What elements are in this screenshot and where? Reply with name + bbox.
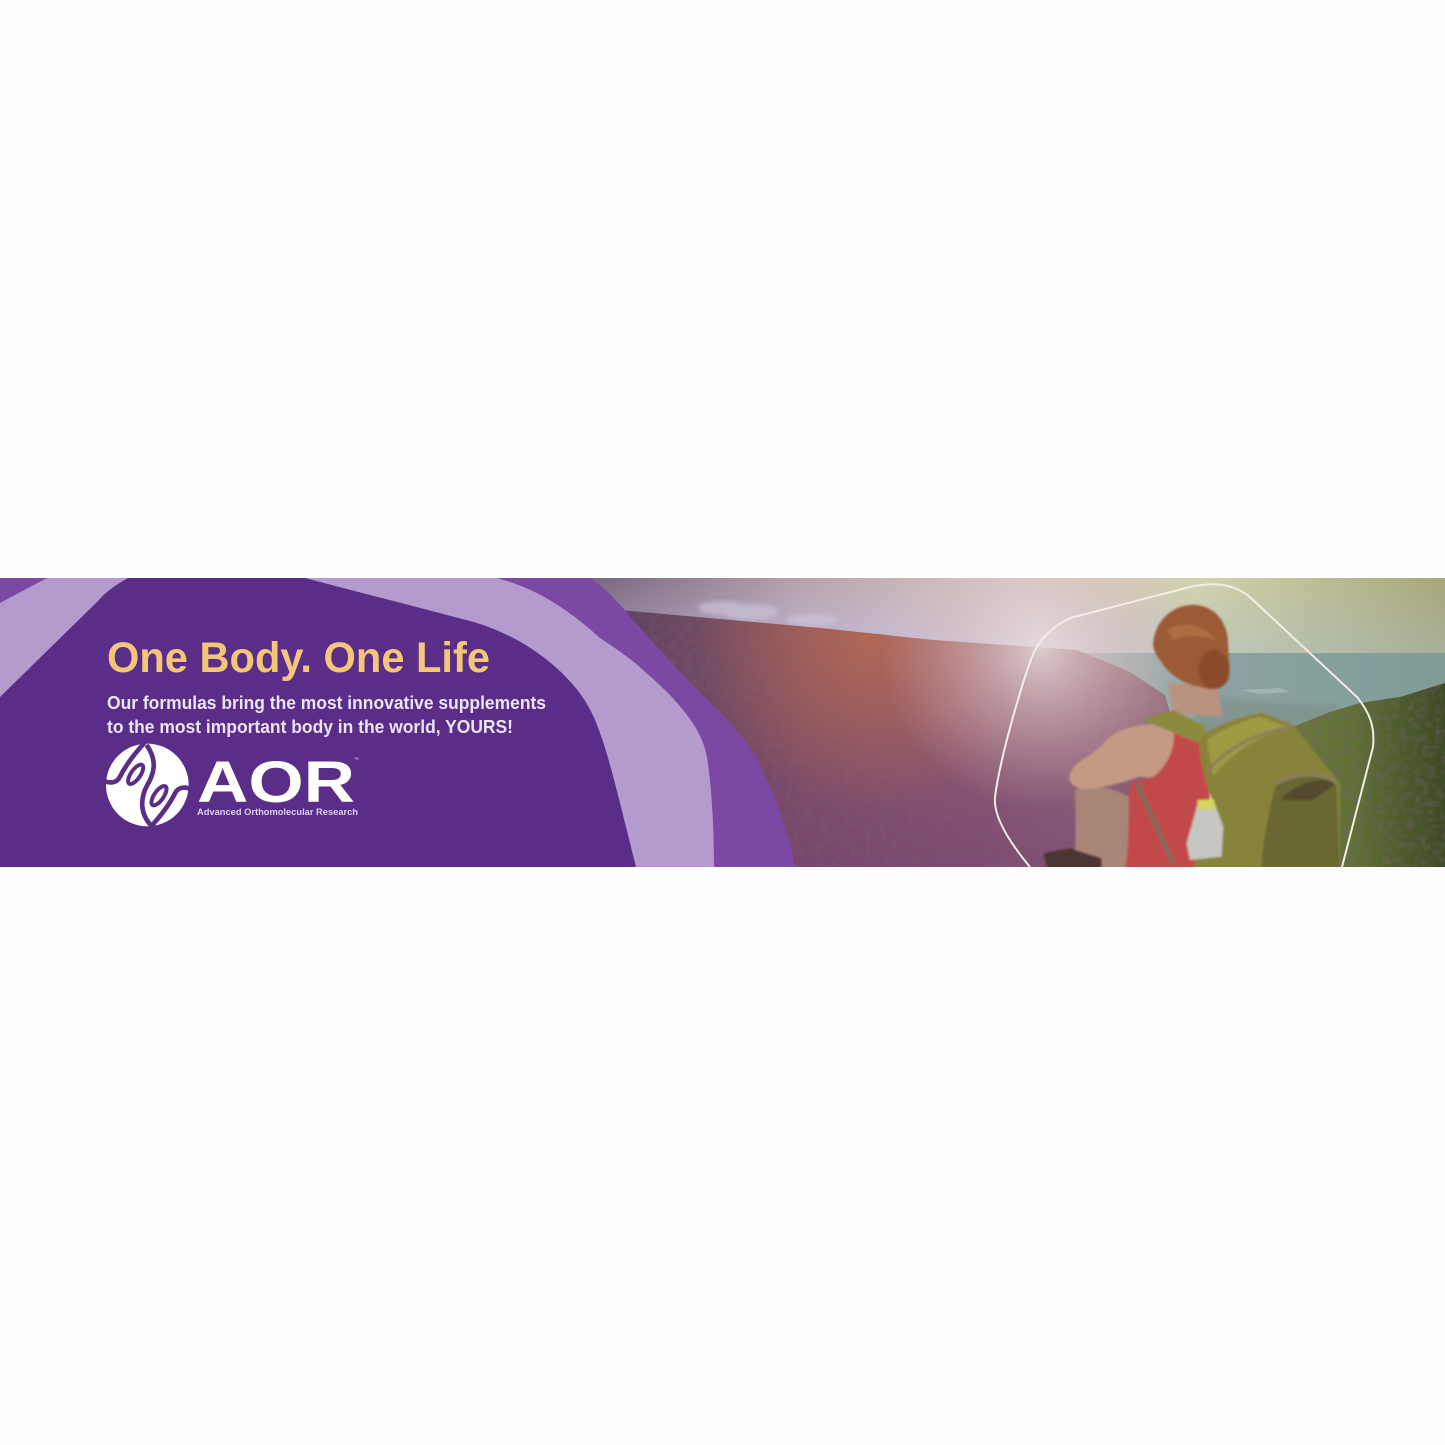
photo: hiker with backpack [1043,605,1340,880]
hexagonal outline [995,584,1373,867]
hair [1153,605,1230,689]
tagline: Advanced Orthomolecular Research [197,807,358,817]
trademark: ™ [354,757,359,763]
wordmark: AOR [197,750,355,815]
subtext: to the most important body in the world, YOURS! [107,717,513,737]
purple corner [0,578,47,603]
hillside [625,610,1170,867]
backpack pocket [1260,776,1340,867]
subtext [107,693,546,737]
lilac shape: inner band [0,578,714,867]
arm and shoulder [1069,723,1200,789]
banner canvas [0,578,1445,867]
water bottle [1187,800,1223,860]
dark purple shape: main panel [0,578,636,867]
subtext: Our formulas bring the most innovative supplements [107,693,546,713]
leg [1074,786,1130,867]
banner [0,578,1445,880]
icon: AOR helix emblem [104,742,191,828]
AOR logo [104,742,359,828]
hair bun [1199,650,1229,689]
heading: One Body. One Life [107,634,490,682]
bag side strap [1137,783,1173,863]
green treeline [1220,680,1445,870]
photo: hillside landscape [590,578,1445,870]
neck [1168,683,1223,717]
purple shape: outer band [497,578,795,867]
backpack [1190,713,1340,880]
red tank top [1123,730,1220,880]
sandal [1042,847,1103,867]
backpack strap [1142,710,1207,743]
